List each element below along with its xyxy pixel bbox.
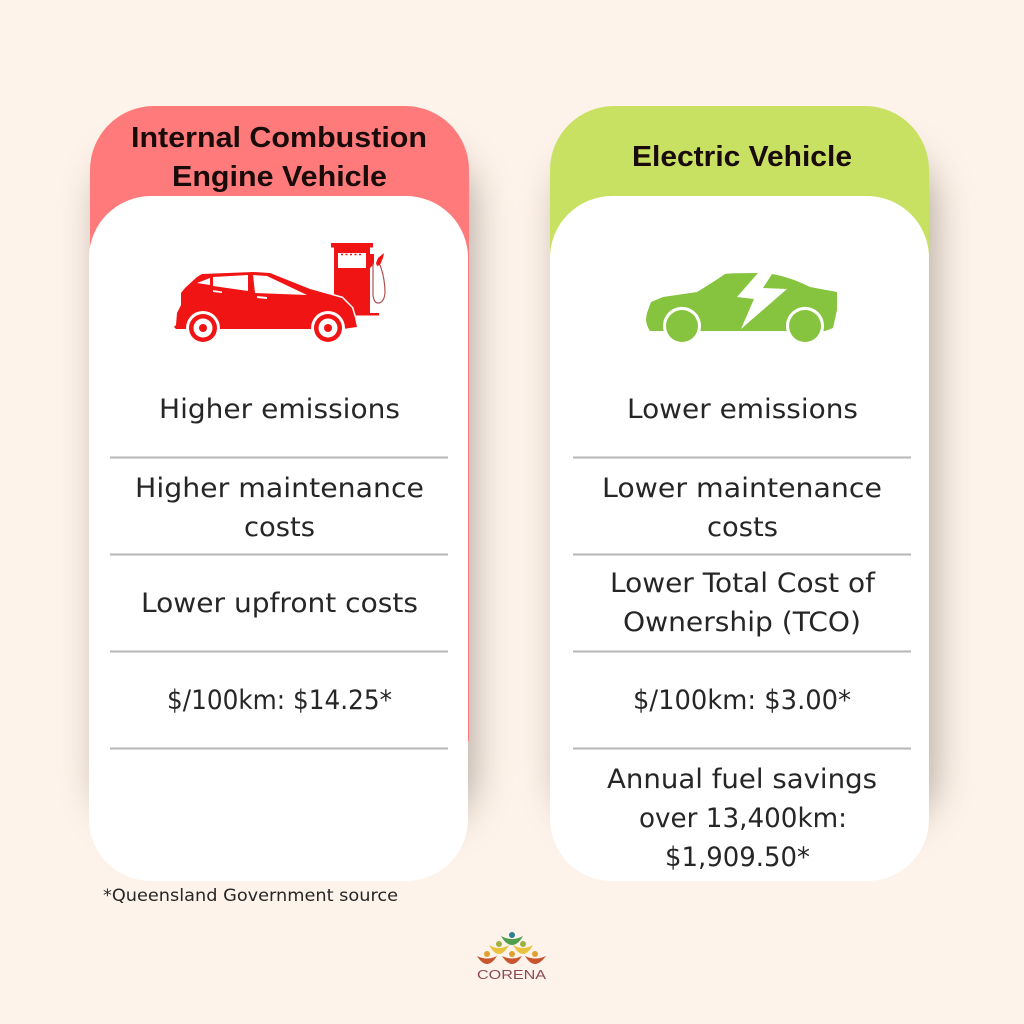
text: annual fuel savings: over 13,400km: (639, 803, 847, 834)
text: cost per 100km electric: $/100km: $3.00* (633, 685, 851, 716)
text: lower emissions: Lower emissions (627, 394, 858, 425)
icon: electric car with lightning bolt (646, 273, 837, 342)
text: lower upfront costs: Lower upfront costs (141, 588, 418, 619)
text: lower total cost of ownership (610, 568, 877, 638)
text: higher maintenance costs (135, 473, 424, 543)
icon: petrol car at fuel pump (174, 243, 385, 345)
text: higher maintenance costs: costs (244, 512, 315, 543)
text: lower maintenance costs (602, 473, 882, 543)
text: lower total cost of ownership: Ownership (TCO) (623, 607, 861, 638)
text: higher emissions: Higher emissions (159, 394, 400, 425)
text: annual fuel savings: $1,909.50* (665, 842, 810, 873)
logo: CORENA (477, 932, 546, 982)
text: annual fuel savings: Annual fuel savings (607, 764, 877, 795)
panel body: white card (89, 196, 468, 881)
text: cost per 100km petrol: $/100km: $14.25* (167, 685, 392, 716)
text: lower maintenance costs: Lower maintenance (602, 473, 882, 504)
text: lower maintenance costs: costs (707, 512, 778, 543)
logo wordmark: CORENA (477, 967, 546, 982)
heading: electric vehicle: Electric Vehicle (632, 141, 852, 173)
panel: internal combustion engine vehicle (89, 106, 472, 881)
panel: electric vehicle (550, 106, 933, 881)
text: lower total cost of ownership: Lower Total Cost of (610, 568, 877, 599)
heading: internal combustion engine vehicle: Internal Combustion (131, 122, 427, 154)
panel header: red (90, 106, 469, 741)
text: higher maintenance costs: Higher maintenance (135, 473, 424, 504)
panel body: white card (550, 196, 929, 881)
footnote: source: *Queensland Government source (103, 886, 398, 905)
panel header: green (550, 106, 929, 741)
icon: people pyramid (477, 932, 546, 964)
text: annual fuel savings (607, 764, 877, 873)
heading: internal combustion engine vehicle: Engine Vehicle (172, 161, 387, 193)
heading: internal combustion engine vehicle (131, 122, 427, 193)
